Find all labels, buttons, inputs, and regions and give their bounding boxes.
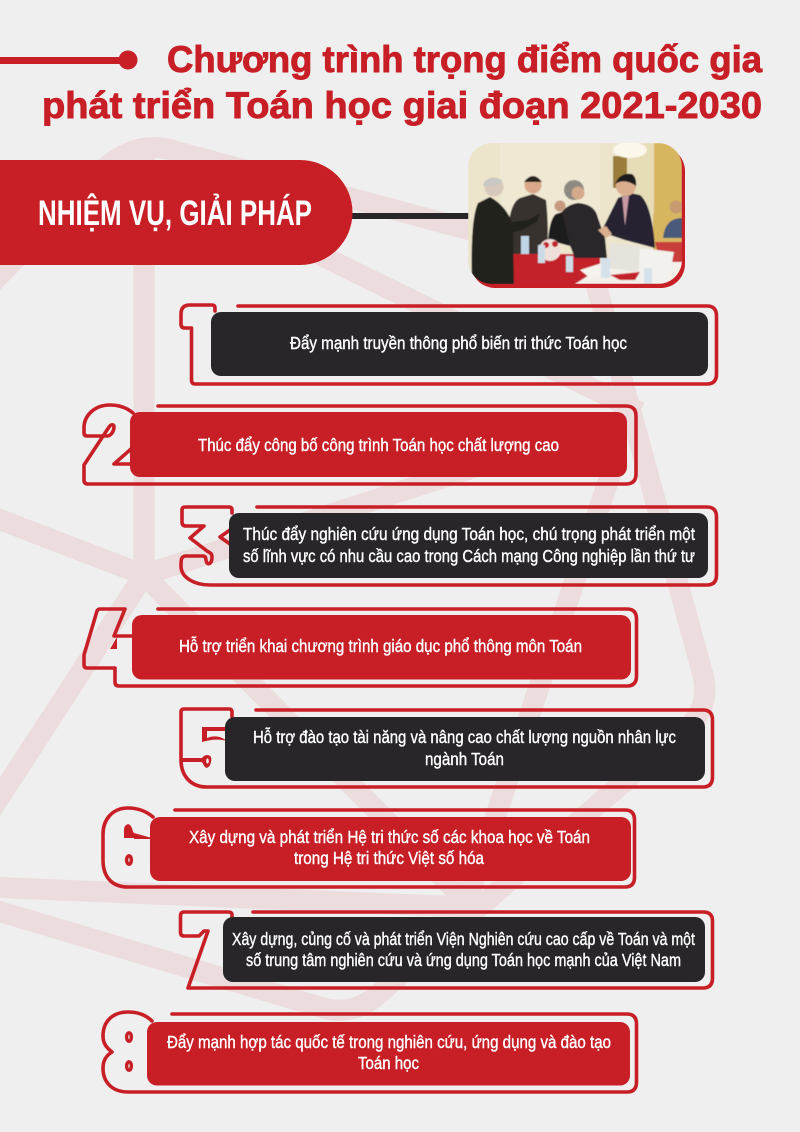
number 7 outline <box>180 912 712 988</box>
number 4 outline <box>84 609 636 686</box>
text 6 <box>189 827 590 868</box>
text 7: Xây dựng, củng cố và phát triển Viện Nghiên cứu cao cấp về Toán và một <box>232 929 695 949</box>
text 7: số trung tâm nghiên cứu và ứng dụng Toán học mạnh của Việt Nam <box>246 950 681 970</box>
text 3: số lĩnh vực có nhu cầu cao trong Cách mạng Công nghiệp lần thứ tư <box>243 546 695 566</box>
text 4: Hỗ trợ triển khai chương trình giáo dục phổ thông môn Toán <box>179 635 582 656</box>
item 8 <box>103 1012 636 1092</box>
text 8: Đẩy mạnh hợp tác quốc tế trong nghiên cứu, ứng dụng và đào tạo <box>167 1032 611 1052</box>
card 1 <box>211 312 708 376</box>
item 4 <box>84 609 636 686</box>
text 8 <box>167 1032 611 1073</box>
text 3: Thúc đẩy nghiên cứu ứng dụng Toán học, chú trọng phát triển một <box>243 524 695 544</box>
number 6 inner marks <box>124 824 152 864</box>
text 5: Hỗ trợ đào tạo tài năng và nâng cao chất lượng nguồn nhân lực <box>253 726 676 747</box>
card 3 <box>229 513 708 578</box>
number 5 inner strokes <box>181 727 227 768</box>
item 1 <box>181 305 716 384</box>
card 7 <box>223 917 705 982</box>
text 2: Thúc đẩy công bố công trình Toán học chất lượng cao <box>198 435 559 455</box>
number 2 outline <box>84 405 636 484</box>
text 7 <box>232 929 695 970</box>
item 3 <box>181 507 716 585</box>
card 2 <box>130 412 627 477</box>
text 6: Xây dựng và phát triển Hệ tri thức số các khoa học về Toán <box>189 827 590 847</box>
number 8 inner rings <box>127 1033 131 1070</box>
section heading pill: NHIỆM VỤ, GIẢI PHÁP <box>38 193 312 233</box>
card 8 <box>147 1022 630 1086</box>
text 3 <box>243 524 695 566</box>
card 5 <box>225 717 705 781</box>
text 5: ngành Toán <box>425 749 504 769</box>
number 6 outline <box>103 808 634 887</box>
photo: meeting handshake <box>468 142 685 288</box>
section heading pill <box>0 160 352 265</box>
title: Chương trình trọng điểm quốc gia <box>167 39 762 80</box>
text 1: Đẩy mạnh truyền thông phổ biến tri thức Toán học <box>290 333 627 353</box>
item 6 <box>103 808 634 887</box>
title accent line with dot <box>0 50 138 70</box>
number 3 outline <box>181 507 716 585</box>
item 2 <box>84 405 636 484</box>
item 7 <box>180 912 712 988</box>
text 6: trong Hệ tri thức Việt số hóa <box>294 848 484 868</box>
number 4 inner mark <box>110 637 117 649</box>
card 6 <box>150 817 631 881</box>
number 1 outline <box>181 305 716 384</box>
number 8 outline <box>103 1012 636 1092</box>
title: phát triển Toán học giai đoạn 2021-2030 <box>42 85 762 126</box>
card 4 <box>132 615 631 680</box>
connector between heading and photo <box>350 213 470 219</box>
text 5 <box>253 726 676 769</box>
title <box>42 39 762 126</box>
number 5 outline <box>181 709 712 787</box>
item 5 <box>181 709 712 787</box>
text 8: Toán học <box>358 1053 419 1073</box>
